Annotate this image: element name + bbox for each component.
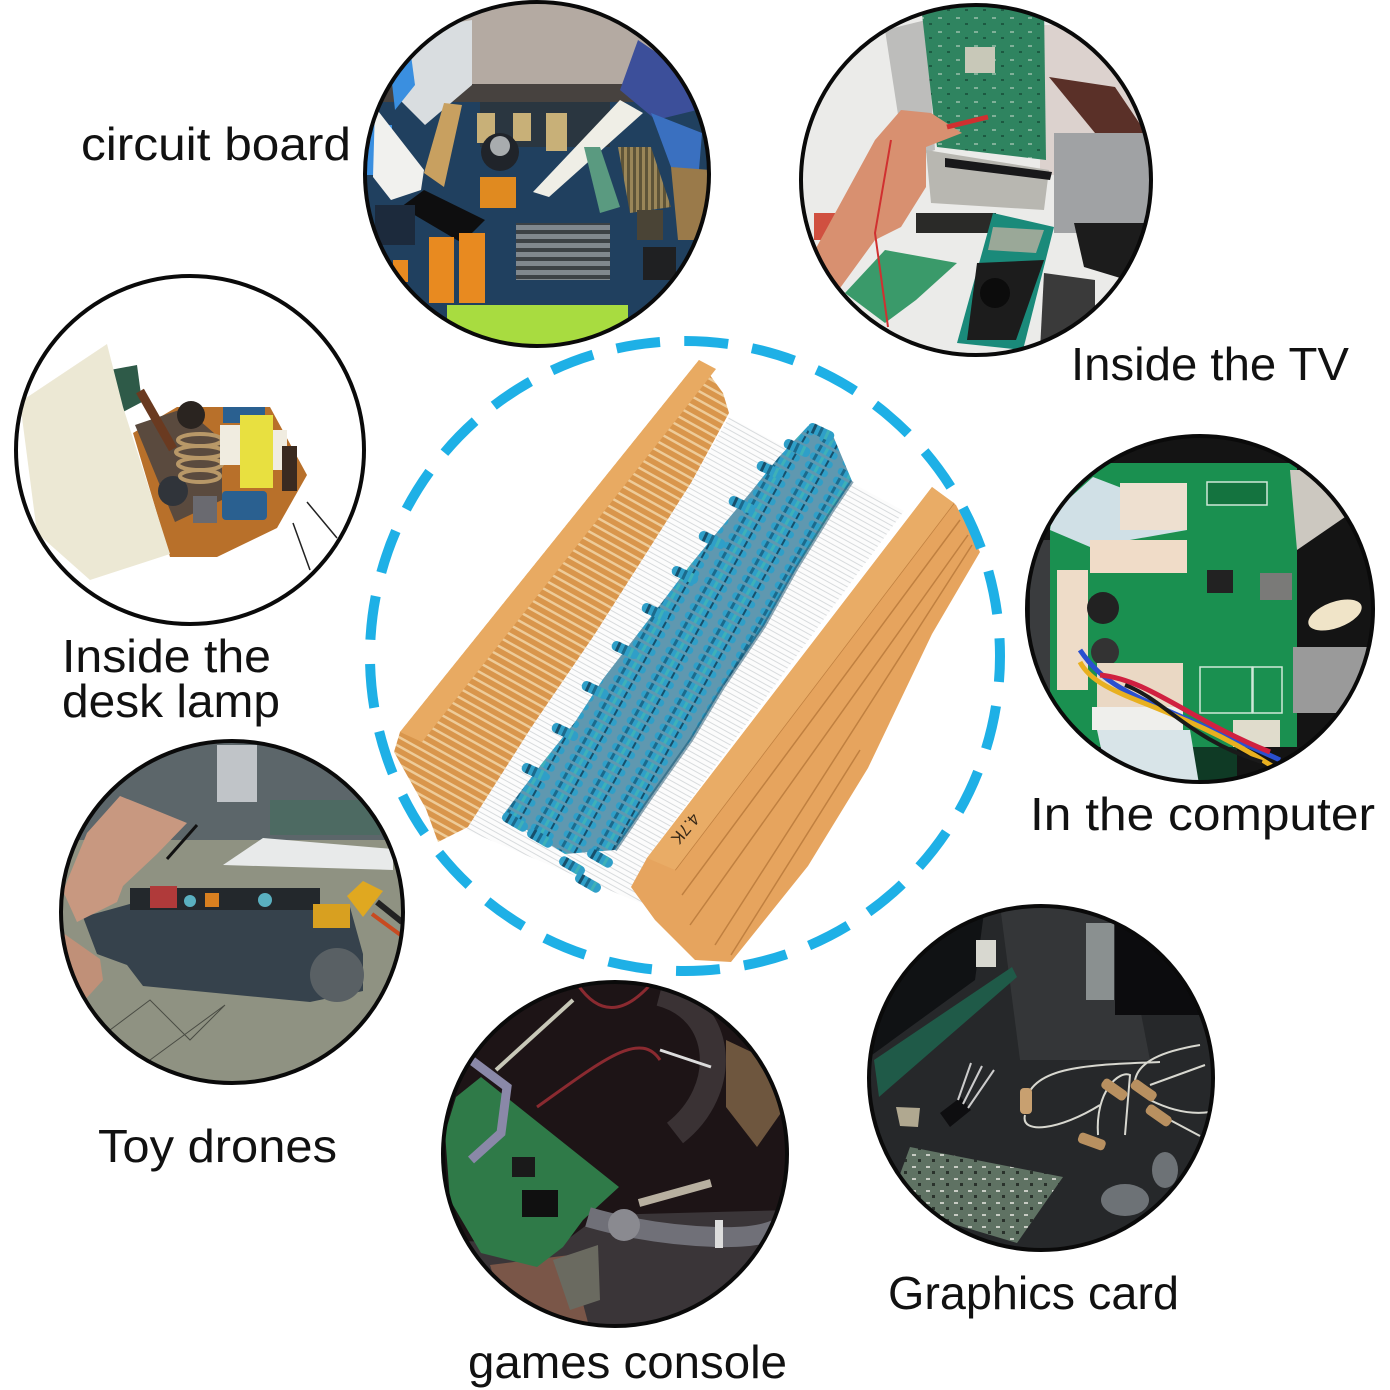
white wire field — [466, 417, 904, 911]
photo circle: graphics card — [865, 905, 1215, 1255]
label: Inside the TV: Inside the TV — [1071, 338, 1349, 390]
label: Inside the desk lamp: Inside the — [62, 630, 271, 682]
tape value label: 4.7K — [667, 809, 703, 848]
resistor bodies band — [503, 426, 852, 854]
label: Graphics card: Graphics card — [888, 1267, 1179, 1319]
band shadow edge — [615, 481, 852, 850]
label: games console: games console — [468, 1336, 787, 1388]
lower left tape layers with leads — [394, 360, 729, 842]
label: Toy drones: Toy drones — [98, 1120, 337, 1172]
label: In the computer: In the computer — [1030, 788, 1375, 840]
upper left paper tape — [400, 360, 716, 742]
photo circle: inside the desk lamp — [15, 275, 365, 625]
resistor strip product image — [394, 360, 980, 962]
label: circuit board: circuit board — [81, 118, 351, 170]
stray resistors — [500, 422, 836, 894]
photo circle: circuit board — [360, 0, 714, 350]
photo circle: inside the TV — [800, 0, 1155, 360]
right lower tape layers — [631, 487, 980, 962]
right tape edges — [675, 503, 972, 955]
photo circle: in the computer — [1025, 435, 1375, 790]
top right paper tape — [647, 487, 954, 870]
label: Inside the desk lamp — [62, 630, 280, 727]
dashed circle around resistors — [370, 341, 1000, 971]
label: Inside the desk lamp: desk lamp — [62, 675, 280, 727]
photo circle: games console — [440, 980, 790, 1330]
photo circle: toy drones — [60, 740, 405, 1085]
